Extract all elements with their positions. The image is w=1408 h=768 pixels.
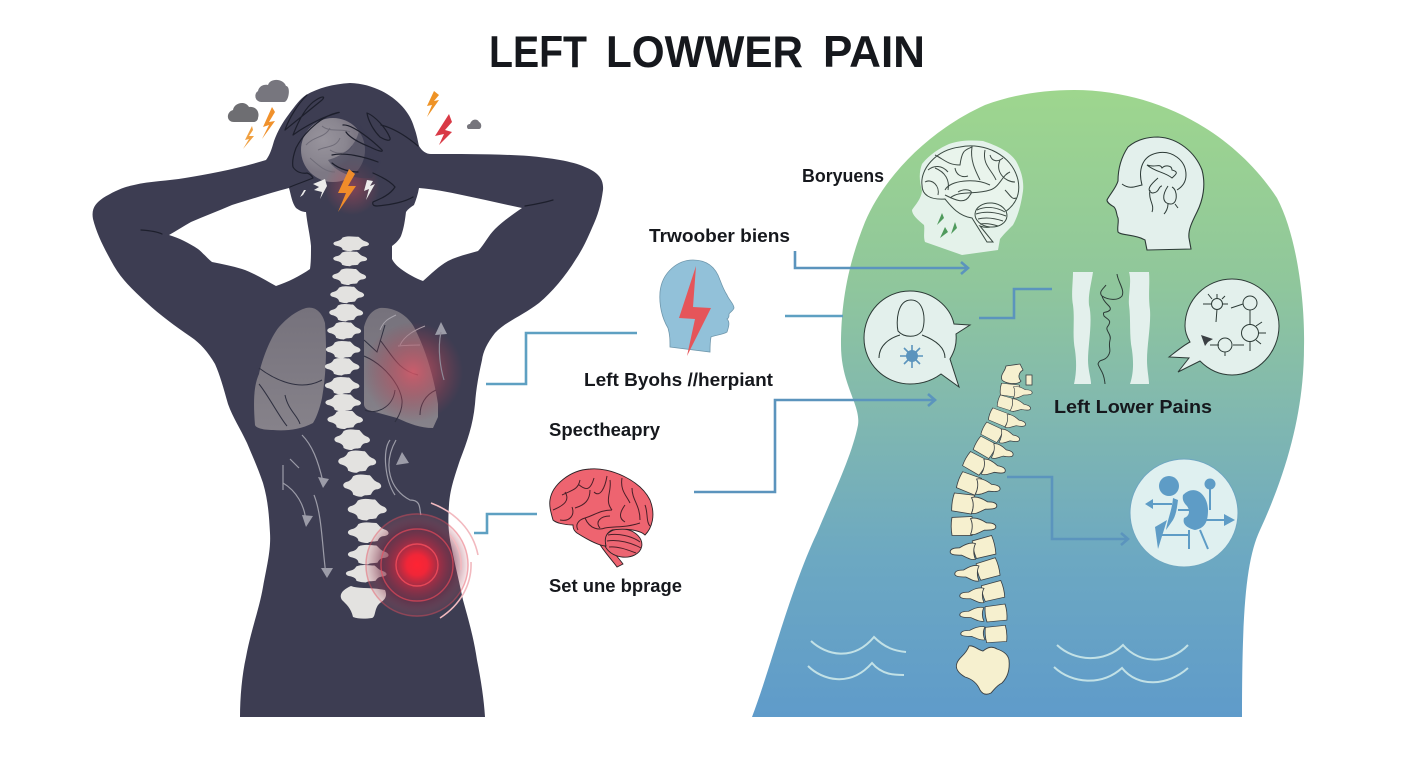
label: Set une bprage: Set une bprage: [549, 576, 682, 596]
label: Left Byohs //herpiant: Left Byohs //herpiant: [584, 370, 773, 390]
connector: body to Left Byohs: [486, 333, 637, 384]
icon: legs and nerve: [1072, 272, 1150, 384]
panel: right head silhouette: [752, 90, 1304, 717]
label: Boryuens: Boryuens: [802, 166, 884, 186]
label: Spectheapry: Spectheapry: [549, 420, 660, 440]
icon: head profile with nerves: [1107, 137, 1204, 250]
spine (back view): [325, 236, 389, 619]
title: LOWWER: [606, 28, 803, 77]
title: PAIN: [823, 28, 925, 77]
brain in head: [301, 118, 380, 215]
hands outline: [141, 95, 553, 234]
spine (side view): [950, 364, 1032, 694]
connector: brain to spine arrow: [694, 400, 935, 492]
panel: left body figure: [93, 80, 603, 717]
decorative waves: right: [1054, 645, 1188, 682]
connector: bubble to legs: [979, 289, 1052, 318]
connector: pain to brain: [474, 514, 537, 533]
icon: head lightning: [300, 169, 375, 212]
icon: head with lightning: [660, 260, 734, 356]
icon: brain in head profile: [912, 140, 1023, 255]
speech bubble: nerve network: [1169, 279, 1279, 375]
icon: circle diagram: [1130, 459, 1238, 567]
pain target: [365, 503, 478, 618]
icon: clouds and lightning: [228, 80, 481, 149]
speech bubble: person: [864, 291, 970, 387]
icon: red brain: [550, 469, 653, 567]
decorative waves: left: [808, 637, 906, 679]
body silhouette: [93, 83, 603, 717]
title: LEFT: [489, 28, 587, 77]
body flow arrows: [283, 322, 447, 578]
lungs: [254, 308, 463, 430]
connector: spine to circle arrow: [1007, 477, 1128, 539]
label: Left Lower Pains: Left Lower Pains: [1054, 397, 1212, 417]
connector: head icon to bubble: [785, 315, 843, 317]
label: Trwoober biens: Trwoober biens: [649, 226, 790, 246]
connector: Trwoober biens arrow: [795, 251, 968, 268]
